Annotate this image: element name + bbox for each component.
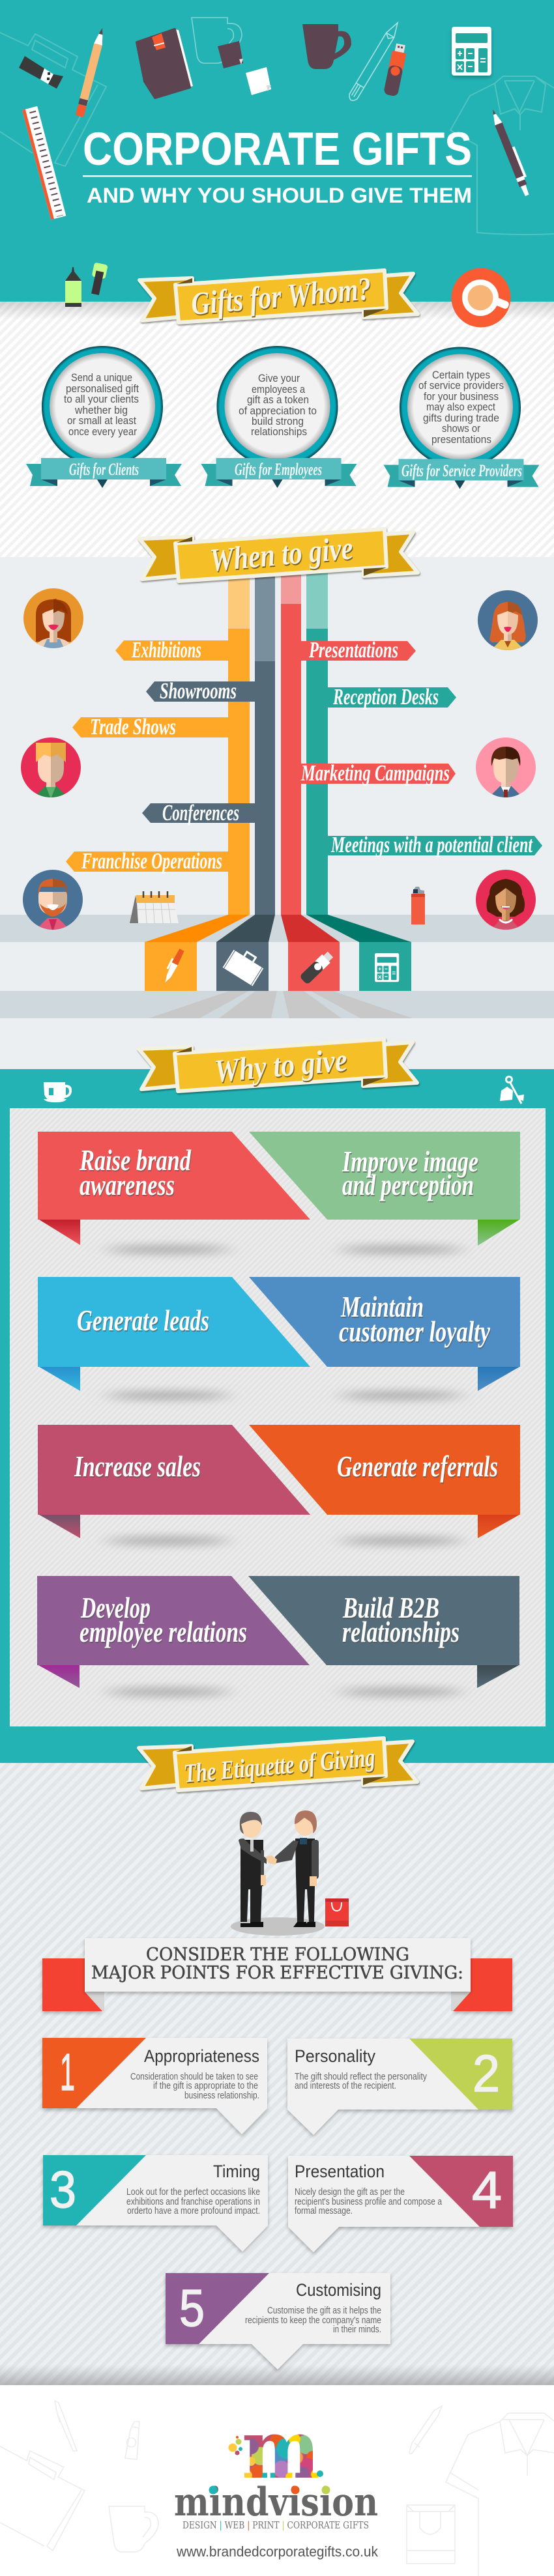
icon: dark mug [302,24,351,69]
text: clients description: Send a unique [71,372,132,384]
card text: awareness [80,1168,175,1201]
card text [339,1290,490,1348]
logo mark: m [242,2402,320,2497]
title: CORPORATE GIFTS [83,124,472,175]
card body: in their minds. [333,2324,381,2335]
text: providers description: for your business [424,391,499,403]
card title: Customising [296,2280,381,2300]
text: employees description: Give your [258,373,300,384]
text: employees description [239,373,317,438]
panel: why to give [0,1069,554,1763]
label: franchise operations [66,848,228,874]
icon: orange usb [383,43,408,97]
footer outlines [0,2401,554,2576]
text: clients description: once every year [68,426,137,438]
icon: tea cup [44,1082,72,1102]
card body: exhibitions and franchise operations in [126,2196,260,2207]
panel: gifts for service providers [383,347,540,489]
text: employees description: gift as a token [247,394,309,406]
label: marketing campaigns: Marketing Campaigns [300,760,450,786]
panel: gifts for clients [26,346,182,488]
icon: green marker cap [88,263,108,296]
outline: header shirt [450,76,554,235]
card body: formal message. [295,2205,353,2216]
card body [126,2186,260,2216]
card body [295,2186,443,2216]
card 2: personality [287,2039,512,2135]
text: providers description: gifts during trade [423,412,499,424]
card row 3: generate referrals [249,1425,520,1545]
card text: employee relations [80,1615,247,1648]
card 3: timing [43,2155,268,2252]
text: providers description [418,369,504,446]
chart: when to give columns [0,573,554,1018]
card text: Build B2B [342,1591,439,1624]
avatar: woman orange [23,588,83,651]
card body: business relationship. [184,2090,259,2101]
title rule [83,175,472,177]
tagline: DESIGN | WEB | PRINT | CORPORATE GIFTS [182,2521,369,2531]
banner: gifts for whom [139,270,418,322]
column: slate [216,573,277,1018]
card text: Maintain [340,1290,424,1323]
text: clients description: to all your clients [64,394,139,405]
avatar: man pink [476,737,536,800]
avatar: woman blue [478,590,538,653]
avatar: man red [21,737,81,800]
icon: white sticky note [246,67,271,95]
icon: usb in box [299,951,334,985]
label: conferences [142,800,255,825]
banner title: Why to give [213,1041,349,1089]
label: showrooms: Showrooms [160,678,237,704]
card text: Raise brand [79,1143,192,1177]
icon: white pen [160,947,184,984]
card 3: timing: 3 [50,2160,76,2218]
text: employees description: of appreciation to [239,405,317,417]
icon: calculator [452,27,491,76]
card body: recipient's business profile and compose a [295,2196,443,2207]
icon: coffee cup top view [451,268,511,327]
text: providers description: Certain types [432,369,490,381]
card body: orderto have a more profound impact. [127,2205,260,2216]
icon: lighter [411,887,425,924]
card text [342,1145,478,1201]
subtitle: AND WHY YOU SHOULD GIVE THEM [87,184,472,207]
text: providers description: may also expect [426,401,495,413]
card 2: personality: 2 [473,2044,500,2102]
card text: and perception [342,1168,474,1201]
card text: Develop [80,1591,151,1624]
banner title: The Etiquette of Giving [182,1742,376,1788]
card row 2: generate leads [38,1277,310,1399]
hands [265,1855,277,1865]
card title: Personality [295,2046,375,2066]
text: employees description: build strong [252,416,304,427]
card row 4: build b2b relationships [248,1576,519,1696]
card text: Increase sales [74,1450,201,1483]
label: conferences: Conferences [162,800,239,825]
text: clients description: or small at least [67,415,136,427]
icon: dark sticky note [218,41,243,68]
card 4: presentation: 4 [472,2161,502,2219]
icon: highlighter [65,267,81,307]
heading text [91,1945,463,1983]
website url: www.brandedcorporategifts.co.uk [176,2543,379,2560]
icon: calculator in box [375,953,399,982]
card 4: presentation [288,2156,513,2252]
text: clients description [64,372,139,438]
card row 2: maintain customer loyalty [249,1277,520,1399]
icon: desk calendar [130,891,179,923]
text: providers description: presentations [431,434,491,446]
column: red [281,573,342,1018]
text: clients description: personalised gift [66,383,139,395]
card body: recipients to keep the company's name [245,2315,381,2326]
card text: relationships [342,1615,459,1648]
card text [80,1591,247,1648]
label: trade shows: Trade Shows [90,714,176,739]
card body [295,2071,427,2091]
ribbon label: Gifts for Employees [235,460,322,479]
card body: Look out for the perfect occasions like [126,2186,260,2197]
text: employees description: relationships [251,426,307,438]
icon: pencil [76,27,106,117]
label: exhibitions: Exhibitions [131,637,201,663]
card title: Appropriateness [144,2046,259,2066]
card body [245,2305,381,2335]
avatar: woman red [476,870,536,932]
banner: why to give [139,1039,417,1091]
icon: pen [489,107,533,197]
panel: header [0,0,554,302]
banner title: Gifts for Whom? [190,270,373,322]
icon: usb drive [19,56,63,89]
banner: when to give [139,529,418,581]
card body: Nicely design the gift as per the [295,2186,405,2197]
card body: and interests of the recipient. [295,2080,396,2091]
text: clients description: whether big [74,405,128,416]
card body: if the gift is appropriate to the [153,2080,258,2091]
illustration: handshake [231,1810,349,1936]
wordmark: mindvision [174,2480,378,2525]
card text: Generate leads [77,1304,209,1337]
ribbon label: Gifts for Clients [69,460,139,479]
label: franchise operations: Franchise Operations [81,848,222,874]
banner: the etiquette of giving [139,1738,417,1790]
card row 1: raise brand awareness [38,1132,310,1253]
text: providers description: of service providers [418,380,504,392]
icon: outline mug [192,18,242,63]
text: employees description: employees a [252,384,306,395]
icon: key and tag [500,1076,524,1104]
logo: mindvision [174,2402,378,2531]
card 1: appropriateness: 1 [60,2043,75,2101]
label: reception desks: Reception Desks [332,684,439,709]
card text [342,1591,459,1648]
card text: Improve image [342,1145,478,1178]
heading text: MAJOR POINTS FOR EFFECTIVE GIVING: [91,1963,463,1983]
card text [79,1143,192,1201]
card 5: customising [166,2273,390,2369]
gift bag [325,1898,349,1926]
text: providers description: shows or [442,423,480,435]
card row 4: develop employee relations [37,1576,310,1696]
right man [275,1810,319,1927]
icon: outline pencil [347,20,401,102]
card title: Timing [213,2162,260,2181]
icon: notebook [137,29,193,98]
card 5: customising: 5 [179,2279,205,2337]
card row 1: improve image [249,1132,520,1253]
card title: Presentation [295,2162,385,2181]
card body: Consideration should be taken to see [130,2071,258,2082]
left man [239,1812,267,1927]
heading ribbon: consider the following [42,1938,512,2011]
avatar: man blue [23,870,83,932]
banner title: When to give [209,530,355,578]
card body [130,2071,259,2101]
icon: briefcase [223,945,267,986]
panel: gifts for employees [201,346,357,488]
card body: The gift should reflect the personality [295,2071,427,2082]
outline: header briefcase [0,33,106,166]
column: orange [145,573,250,1018]
card text: customer loyalty [339,1315,490,1348]
card body: Customise the gift as it helps the [267,2305,381,2316]
column: teal [306,573,413,1018]
label: presentations: Presentations [308,637,398,663]
card 1: appropriateness [42,2038,267,2134]
heading text: CONSIDER THE FOLLOWING [146,1945,409,1965]
icon: ruler [22,106,66,220]
card row 3: increase sales [38,1425,310,1545]
